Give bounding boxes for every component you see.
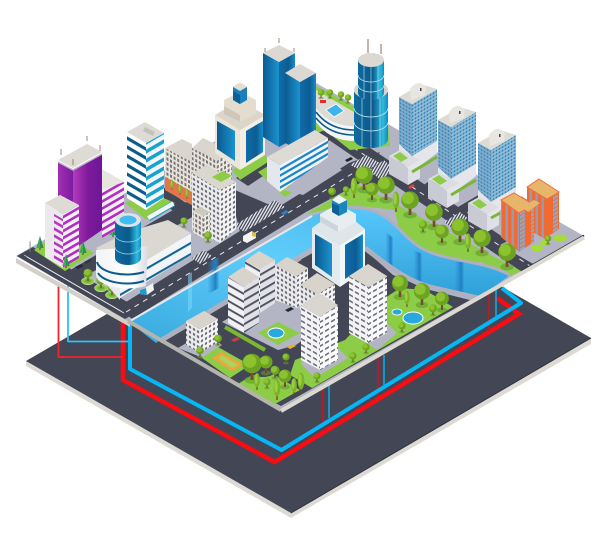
upper plate roads	[17, 118, 540, 319]
blue glass apartment tower two	[428, 106, 476, 208]
river water basin	[128, 206, 510, 343]
park trees along river	[328, 166, 516, 270]
building: beige art-deco tower	[215, 83, 265, 170]
flower lot trees	[29, 223, 118, 299]
building: purple tower	[58, 136, 102, 250]
green lots upper city	[34, 86, 521, 276]
building: blue twin towers	[263, 38, 316, 150]
building: pool terrace with stripes	[316, 89, 354, 141]
plate front rim	[128, 238, 584, 411]
small grey apartment	[186, 311, 222, 358]
red supply pipe	[58, 285, 519, 462]
vehicles on upper roads	[75, 157, 415, 295]
building: beige centre block	[192, 138, 232, 195]
orange apartment block	[500, 179, 584, 271]
basketball court	[202, 347, 250, 378]
blue water pipe	[68, 285, 521, 450]
building: purple rear slab	[102, 169, 124, 238]
white and blue riverside tower	[312, 195, 365, 287]
crosswalks	[192, 155, 468, 264]
building: white horizontal office	[267, 130, 342, 195]
building: cyan striped tower	[127, 122, 175, 221]
lower dark slab	[26, 186, 591, 518]
building: white and magenta front block	[45, 195, 87, 268]
white residential tower one	[349, 264, 387, 344]
building: low office with cylinder tower	[96, 213, 191, 300]
white residential tower two	[301, 293, 338, 370]
building: beige left block	[165, 139, 192, 205]
building: cylindrical glass tower	[354, 39, 388, 148]
striped grey twin slabs	[228, 251, 275, 333]
upper city plate	[16, 83, 584, 410]
blue glass apartment tower three	[468, 129, 516, 232]
lower city ground	[160, 248, 478, 406]
lower park ponds and trees	[242, 275, 449, 400]
grey building rear block	[275, 257, 335, 320]
blue glass apartment tower one	[389, 83, 437, 185]
hedge row and pond plaza	[225, 307, 300, 350]
building: grey front tower with annex	[180, 165, 236, 244]
